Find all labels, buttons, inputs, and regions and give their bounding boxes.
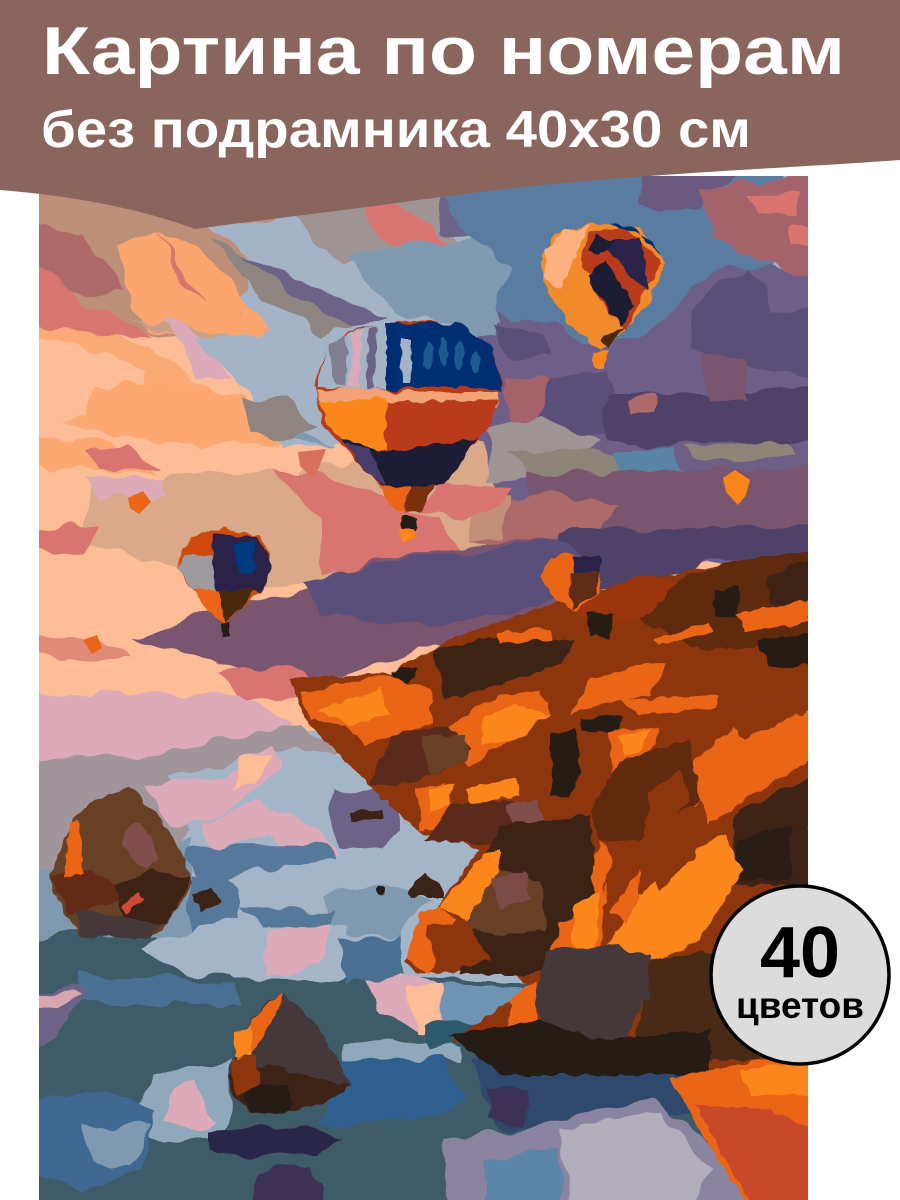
sea	[39, 724, 744, 1200]
badge: 40 colours: 40	[760, 913, 840, 993]
badge: 40 colours: цветов	[736, 985, 864, 1026]
left balloon	[177, 528, 273, 637]
big balloon	[314, 320, 503, 540]
shore: orange beach in the lower right corner	[670, 1059, 808, 1200]
header banner	[0, 0, 900, 229]
tiny distant balloons	[83, 449, 750, 654]
badge: 40 colours	[711, 886, 889, 1064]
cliffs	[290, 545, 840, 1075]
painting: balloons over a sea cliff at sunset	[39, 176, 808, 1200]
top right balloon	[540, 223, 665, 368]
sea rocks	[48, 787, 444, 1113]
balloon behind the cliff	[540, 554, 600, 612]
sky	[39, 176, 808, 1071]
subtitle: без подрамника 40х30 см	[41, 101, 751, 159]
title: Картина по номерам	[42, 13, 845, 89]
